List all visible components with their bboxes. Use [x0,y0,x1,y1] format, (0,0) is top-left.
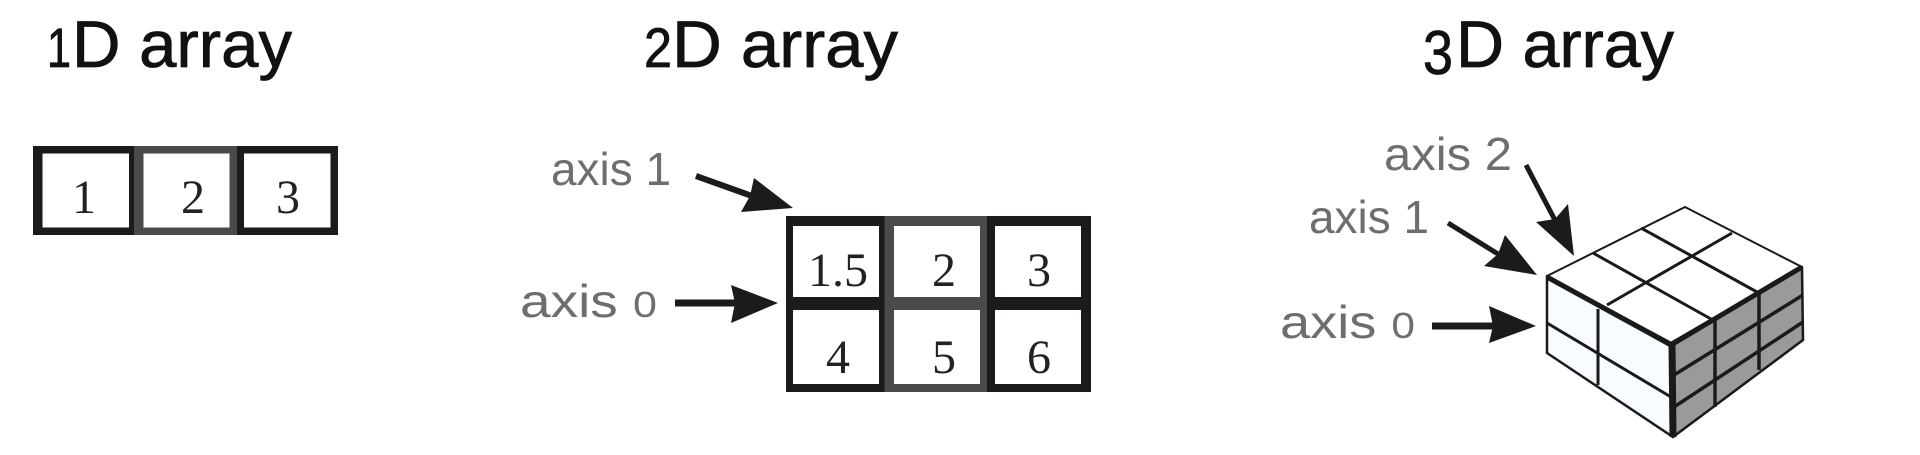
1D array grid: 1 [72,171,96,224]
label: 2D axis 1: axis 1 [551,143,671,195]
right face [1671,267,1803,437]
title: 3D array: D array [1456,7,1674,81]
arrow: 3D axis 0 [1432,306,1536,343]
arrow: 3D axis 1 [1448,223,1537,275]
2D array grid: 4 [826,331,850,384]
label: 2D axis 0: axis 0 [520,275,657,327]
arrow: 2D axis 1 [696,176,793,212]
label: 3D axis 2: axis 2 [1384,128,1512,180]
1D array grid: 3 [276,171,300,224]
3D array cube [1547,207,1803,437]
1D array grid: 2 [181,171,205,224]
2D array grid: 5 [932,331,956,384]
title: 1D array: D array [72,7,292,81]
2D array grid: 6 [1027,331,1051,384]
title: 2D array: 2 [644,16,672,79]
2D array grid: 1.5 [808,244,868,297]
2D array grid [786,216,1091,392]
title: 1D array: 1 [47,16,71,79]
2D array grid: 2 [932,244,956,297]
left face [1547,276,1673,437]
1D array grid [33,146,338,235]
top face [1547,207,1802,343]
heavy edges [1547,267,1802,345]
top grid lines [1593,228,1757,319]
left grid lines [1547,309,1671,397]
right grid lines [1674,292,1803,407]
label: 3D axis 0: axis 0 [1280,296,1415,348]
title: 3D array: 3 [1423,19,1453,88]
title: 2D array: D array [672,7,898,81]
arrow: 2D axis 0 [675,285,778,323]
arrow: 3D axis 2 [1526,165,1574,256]
2D array grid: 3 [1027,244,1051,297]
label: 3D axis 1: axis 1 [1309,191,1429,243]
